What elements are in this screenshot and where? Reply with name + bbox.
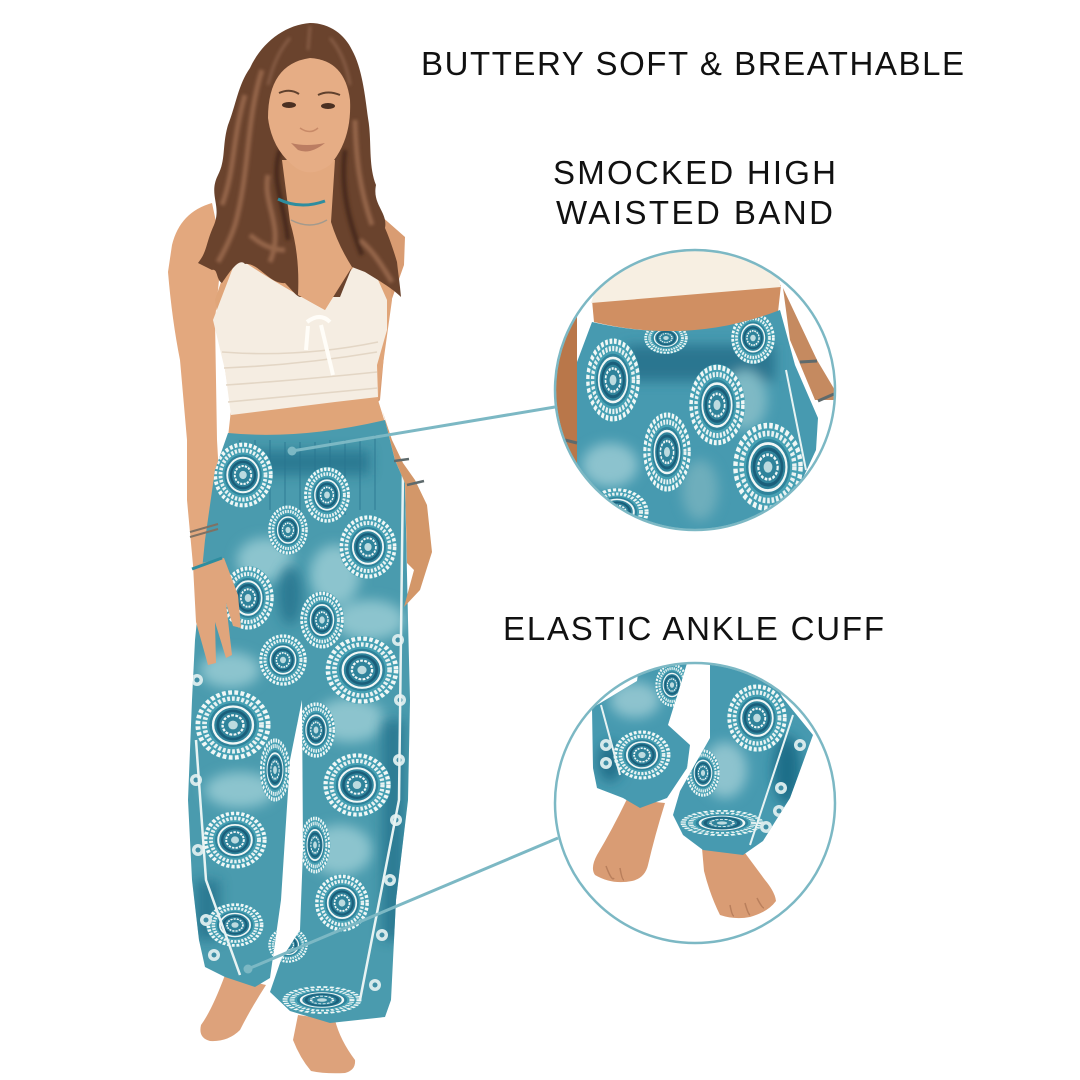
arms in detail: [556, 317, 577, 463]
right shoulder and upper arm: [370, 215, 405, 410]
feet: [200, 975, 355, 1073]
zoomed pants: [577, 310, 818, 529]
heading: smocked band: SMOCKED HIGH: [553, 154, 836, 191]
side border stripes: [196, 470, 403, 1000]
smocking lines on top: [222, 342, 378, 402]
model figure: [168, 23, 432, 1073]
mandala motifs: [195, 442, 399, 1014]
cuff white flowers: [600, 739, 806, 833]
heading: smocked band: [553, 154, 836, 231]
smocked waistband lines: [240, 435, 375, 515]
leader line: ankle cuff: [244, 838, 558, 974]
right forearm and hand: [382, 410, 432, 607]
hair highlights: [218, 26, 392, 282]
detail feet: [593, 799, 665, 882]
leader line: waistband: [288, 407, 555, 456]
pants legs in detail: [592, 664, 813, 855]
side border flowers: [190, 634, 406, 991]
hair: [198, 23, 401, 297]
bare midriff: [592, 285, 781, 331]
side stripe: [786, 370, 806, 470]
left arm: [168, 203, 224, 565]
detail circle: ankle cuff: [550, 655, 840, 948]
light patches: [598, 682, 801, 805]
heading: buttery soft: BUTTERY SOFT & BREATHABLE: [421, 45, 964, 82]
bracelets: [190, 459, 424, 569]
heading: smocked band: WAISTED BAND: [556, 194, 833, 231]
detail circle: waistband: [550, 245, 840, 540]
left hand over pants: [193, 558, 241, 665]
cuff stripes: [601, 705, 793, 845]
face: [268, 58, 350, 172]
tie-dye patches: [200, 538, 405, 875]
torso: [215, 225, 392, 437]
eyes, brows, nose and mouth: [279, 91, 340, 151]
crop top tie: [306, 317, 333, 375]
heading: ankle cuff: ELASTIC ANKLE CUFF: [503, 610, 884, 647]
neck and chest: [282, 160, 352, 310]
crop top hem: [591, 251, 781, 303]
necklaces: [278, 199, 327, 225]
tie-dye in detail: [582, 345, 775, 520]
bracelets in detail: [565, 361, 834, 443]
white crop top: [213, 257, 387, 415]
toes: [606, 866, 764, 916]
cuff mandalas: [613, 663, 787, 836]
patterned pants: [188, 420, 410, 1023]
mandalas in detail: [585, 312, 803, 536]
